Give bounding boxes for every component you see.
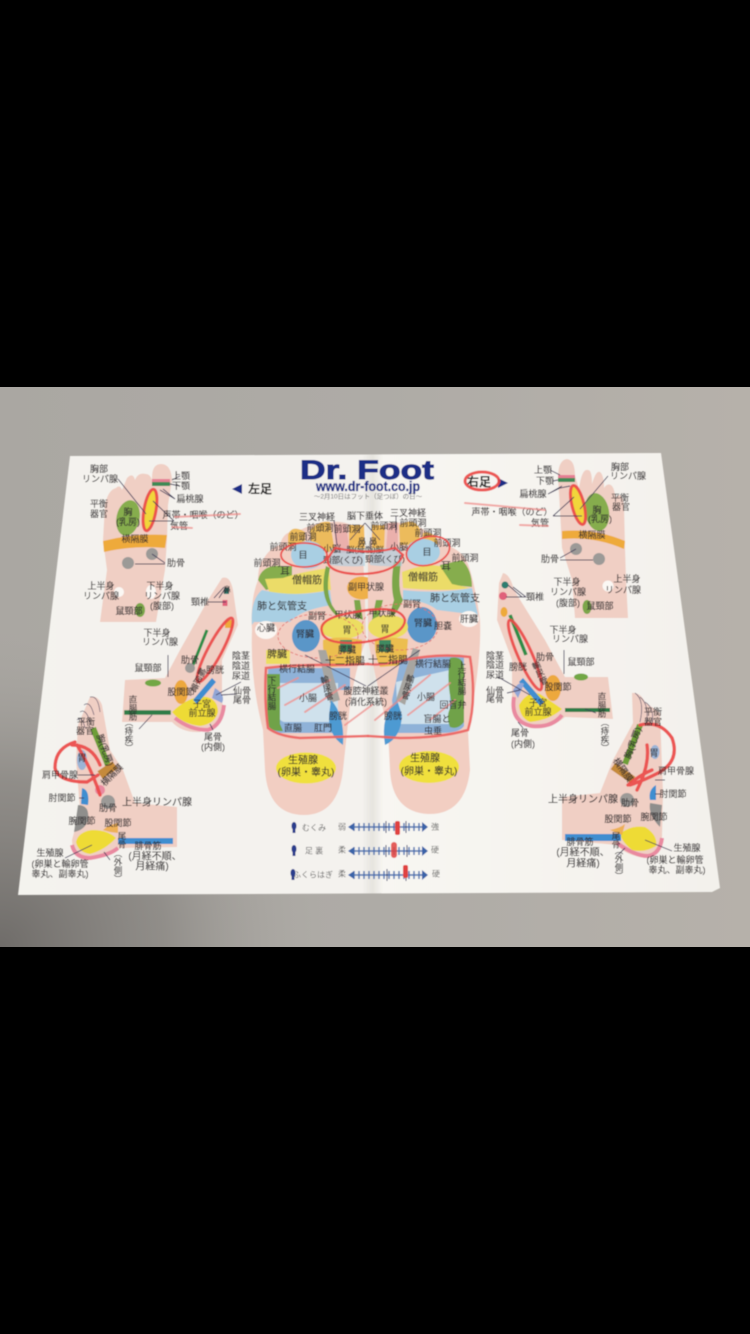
foot: bottom-left side view: 尾骨 xyxy=(117,832,127,848)
foot: central right sole: (消化系統) xyxy=(345,696,387,707)
foot: top-left sole: 下半身 xyxy=(146,580,174,591)
foot: top-left sole: (乳房) xyxy=(116,516,140,527)
central labels: toes to organs: 膵臓 xyxy=(338,644,356,655)
foot: top-right sole: 肋骨 xyxy=(541,554,559,564)
central labels: toes to organs: 耳 xyxy=(280,566,290,578)
central labels: toes to organs: 前頭洞 xyxy=(289,531,317,542)
foot: top-left sole: 横隔膜 xyxy=(121,533,149,544)
foot: central right sole: 虫垂 xyxy=(424,725,442,736)
foot: central right sole: 上行結腸 xyxy=(457,661,467,696)
central labels: toes to organs: 小脳 xyxy=(390,541,408,552)
foot: bottom-right side view: 生殖腺 xyxy=(673,842,701,853)
central labels: toes to organs: 甲状腺 xyxy=(334,609,362,620)
foot: central left sole: (卵巣・睾丸) xyxy=(278,766,334,778)
foot: top-left sole: 胸 xyxy=(123,506,133,517)
central labels: toes to organs: 小脳 xyxy=(323,543,341,554)
central labels: toes to organs: 腎臓 xyxy=(296,629,314,639)
foot: top-left sole: 胸部 xyxy=(90,463,108,474)
central labels: toes to organs: 肺と気管支 xyxy=(430,592,480,604)
label: right foot with red circle: 右足 xyxy=(467,474,491,489)
colon block xyxy=(267,650,350,745)
foot: mid-left side view: (内側) xyxy=(201,741,225,752)
foot: central left sole: 生殖腺 xyxy=(288,754,318,766)
foot: top-right sole: 横隔膜 xyxy=(578,529,606,540)
foot: bottom-right side view: 肘関節 xyxy=(659,788,687,799)
foot: mid-right side view: 尿道 xyxy=(486,669,504,680)
foot: top-right sole: (腹部) xyxy=(556,597,580,608)
central labels: toes to organs: 腎臓 xyxy=(414,618,432,628)
foot: bottom-left side view: 腕関節 xyxy=(68,815,96,826)
foot: top-right sole: 扁桃腺 xyxy=(519,488,547,499)
central labels: toes to organs: 前頭洞 xyxy=(333,523,361,534)
logo: Dr. Foot: ～2月10日はフット（足つぼ）の日～ xyxy=(314,492,423,500)
sole base xyxy=(252,522,366,815)
foot: bottom-left side view: 股関節 xyxy=(104,817,132,828)
foot: central right sole xyxy=(343,521,480,814)
central labels: toes to organs: 脳下垂体 xyxy=(347,510,383,521)
central labels: toes to organs: 肺と気管支 xyxy=(257,600,307,612)
foot: mid-right side view: 肋骨 xyxy=(536,652,554,662)
foot: central left sole: 脾臓 xyxy=(267,648,287,660)
central labels: toes to organs: 目 xyxy=(298,550,308,560)
foot: mid-left side view: リンパ腺 xyxy=(142,636,178,647)
slider: sole: 足 裏 xyxy=(305,846,323,856)
foot: bottom-left side view: 腓骨筋 xyxy=(134,840,162,851)
foot: mid-right side view: 下半身 xyxy=(549,624,577,635)
foot: central left sole xyxy=(252,522,377,815)
central labels: toes to organs: 心臓 xyxy=(257,622,275,633)
central labels: toes to organs: 胃 xyxy=(342,625,352,635)
foot: mid-left side view: 鼻 xyxy=(223,584,231,594)
foot: bottom-left side view: 横隔膜 xyxy=(98,761,125,788)
central labels: toes to organs: 胃 xyxy=(380,624,390,634)
foot: central left sole: 横行結腸 xyxy=(279,663,315,674)
foot: bottom-right side view: 横隔膜 xyxy=(611,755,636,784)
logo: Dr. Foot xyxy=(300,455,434,500)
foot: top-left sole: リンパ腺 xyxy=(144,590,180,601)
foot: central left sole: 肛門 xyxy=(314,723,332,733)
slider: swelling: 強 xyxy=(431,822,439,832)
foot: top-right sole: リンパ腺 xyxy=(610,470,646,481)
central labels: toes to organs: 十二指腸 xyxy=(368,654,408,666)
foot: mid-right side view: (内側) xyxy=(511,738,535,749)
label: right foot with red circle xyxy=(465,472,508,490)
foot: bottom-left side view: 肩甲骨腺 xyxy=(42,769,78,780)
foot: mid-right side view: 陰茎 xyxy=(486,650,504,661)
foot: central right sole: 横行結腸 xyxy=(415,658,451,669)
foot: mid-right side view: リンパ腺 xyxy=(552,633,588,644)
foot: top-right sole: 胸部 xyxy=(611,461,629,472)
foot: top-right sole: 気管 xyxy=(531,517,549,528)
sliders: foot condition scales xyxy=(290,821,440,881)
foot: mid-left side view: 尾骨 xyxy=(204,732,222,742)
black top band xyxy=(0,0,750,387)
foot: bottom-left side view: 平衡 xyxy=(77,716,95,727)
central labels: toes to organs xyxy=(253,507,480,668)
slider: calf: ふくらはぎ xyxy=(293,870,333,880)
foot: mid-left side view: 肋骨 xyxy=(181,655,199,665)
foot: top-left sole: 声帯・咽喉（のど） xyxy=(162,509,244,520)
foot: top-right sole: 平衡 xyxy=(611,492,629,503)
foot: top-left sole: 上顎 xyxy=(172,471,190,481)
foot: top-right sole: 上半身 xyxy=(613,573,641,584)
foot: central right sole: 回盲弁 xyxy=(439,699,467,710)
foot: mid-left side view: 下半身 xyxy=(143,627,171,638)
paper reflexology chart xyxy=(18,453,720,895)
foot: mid-left side view: 仙骨 xyxy=(233,685,251,696)
foot: top-right sole: 鼠頸部 xyxy=(586,600,614,611)
foot: bottom-left side view: (卵巣と輸卵管 xyxy=(32,858,88,869)
foot: mid-left side view: 膀胱 xyxy=(206,665,224,675)
foot: mid-right side view: 前立腺 xyxy=(524,706,552,717)
central labels: toes to organs: 僧帽筋 xyxy=(292,574,322,586)
foot: bottom-left side view: 器官 xyxy=(76,725,94,736)
central labels: toes to organs: 頸部(くび) xyxy=(365,554,405,564)
central labels: toes to organs: 胆嚢 xyxy=(434,620,452,631)
central labels: toes to organs: 脳(延髄)脳 xyxy=(346,544,384,554)
foot: mid-left side view xyxy=(122,578,251,752)
foot: top-right sole: 下顎 xyxy=(536,476,554,486)
label: left foot: 左足 xyxy=(248,481,272,496)
foot: central left sole: 輸尿管 xyxy=(319,674,335,703)
colon block xyxy=(384,648,464,745)
label: left foot xyxy=(232,481,272,496)
foot: top-left sole: 下顎 xyxy=(172,481,190,491)
central labels: toes to organs: 副腎 xyxy=(308,611,326,621)
logo: Dr. Foot: Dr. Foot xyxy=(300,455,434,485)
central labels: toes to organs: 前頭洞 xyxy=(306,522,334,533)
central labels: toes to organs: 副甲状腺 xyxy=(348,581,384,592)
foot: mid-left side view: （痔疾） xyxy=(124,718,134,752)
foot: mid-left side view: 直腸筋 xyxy=(128,695,138,722)
slider: sole: 柔 xyxy=(338,844,346,854)
slider: swelling: むくみ xyxy=(302,824,326,832)
paper sheet xyxy=(18,453,720,895)
foot: bottom-right side view: 尾骨 xyxy=(611,832,621,848)
foot: bottom-left side view: (月経不順、 xyxy=(128,850,182,862)
foot: top-left sole: リンパ腺 xyxy=(82,473,118,484)
foot: mid-right side view: 陰道 xyxy=(486,659,504,670)
foot: mid-left side view: 子宮 xyxy=(193,698,211,709)
central labels: toes to organs: 耳 xyxy=(441,560,451,572)
slider: calf: 柔 xyxy=(338,868,346,878)
central labels: toes to organs: 鼻 xyxy=(368,536,378,547)
foot: top-left sole xyxy=(82,463,244,622)
foot: central right sole: 生殖腺 xyxy=(410,752,440,764)
foot: mid-right side view: 尾骨 xyxy=(486,694,504,704)
foot: mid-right side view: 頸椎 xyxy=(526,591,544,602)
logo: Dr. Foot: www.dr-foot.co.jp xyxy=(315,478,420,494)
central labels: toes to organs: 三叉神経 xyxy=(390,507,426,518)
foot: mid-right side view: 仙骨 xyxy=(486,685,504,696)
foot: top-right sole: 上顎 xyxy=(534,465,552,475)
foot: top-right sole xyxy=(465,459,646,618)
foot: top-right sole: 胸 xyxy=(592,504,602,515)
foot: top-right sole: 声帯・咽喉（のど） xyxy=(471,506,553,517)
foot: bottom-right side view: 胃 xyxy=(649,748,659,758)
foot: bottom-right side view: (月経不順、 xyxy=(556,846,610,858)
central labels: toes to organs: 前頭洞 xyxy=(433,537,461,548)
foot: bottom-left side view: 生殖腺 xyxy=(36,847,64,858)
foot: top-left sole: 平衡 xyxy=(90,498,108,509)
foot: central right sole: 膀胱 xyxy=(384,711,402,721)
foot: mid-left side view: 陰道 xyxy=(232,660,250,671)
slider: calf xyxy=(290,865,440,881)
central labels: toes to organs: 三叉神経 xyxy=(299,511,335,522)
foot: bottom-left side view xyxy=(32,697,192,883)
foot: top-right sole: (乳房) xyxy=(588,513,612,524)
slider: swelling xyxy=(292,821,439,835)
foot: bottom-right side view: 腕関節 xyxy=(640,811,668,822)
foot: top-left sole: (腹部) xyxy=(150,600,174,611)
foot: bottom-left side view: 肋骨 xyxy=(99,803,117,813)
foot: central left sole: 膀胱 xyxy=(329,711,347,721)
grey table background xyxy=(0,387,750,947)
central labels: toes to organs: 頸部(くび) xyxy=(323,555,363,565)
foot: bottom-right side view xyxy=(548,693,706,880)
foot: bottom-left side view: 月経痛) xyxy=(135,860,169,872)
foot: mid-right side view: 直腸筋 xyxy=(597,692,607,719)
slider: calf: 硬 xyxy=(432,870,440,878)
foot: mid-left side view: 輸尿管 xyxy=(188,666,208,695)
foot: bottom-left side view: 胃 xyxy=(77,753,87,763)
foot: central right sole: 盲腸と xyxy=(423,714,451,724)
foot: bottom-left side view: （外側） xyxy=(113,849,123,883)
foot: mid-right side view xyxy=(486,573,613,752)
foot: mid-left side view: 尿道 xyxy=(232,670,250,681)
foot: bottom-right side view: 胸(乳房) xyxy=(622,725,643,760)
central labels: toes to organs: 甲状腺 xyxy=(368,607,396,618)
foot: bottom-right side view: 肩甲骨腺 xyxy=(658,765,694,776)
foot: top-left sole: 肋骨 xyxy=(167,558,185,568)
central labels: toes to organs: 十二指腸 xyxy=(325,654,365,668)
foot: bottom-right side view: 月経痛) xyxy=(566,856,600,870)
foot: central right sole: 輸尿管 xyxy=(400,673,416,702)
central labels: toes to organs: 前頭洞 xyxy=(370,520,398,531)
central labels: toes to organs: 前頭洞 xyxy=(399,517,427,528)
foot: central right sole: 小腸 xyxy=(417,692,435,702)
foot: mid-left side view: 陰茎 xyxy=(232,650,250,661)
foot: mid-left side view: 頸椎 xyxy=(191,596,209,607)
foot: mid-left side view: 鼠頸部 xyxy=(134,662,162,673)
foot: mid-left side view: 前立腺 xyxy=(188,707,216,718)
central labels: toes to organs: 肝臓 xyxy=(460,614,478,624)
foot: top-right sole: リンパ腺 xyxy=(605,584,641,595)
foot: top-left sole: 器官 xyxy=(90,508,108,519)
central labels: toes to organs: 前頭洞 xyxy=(414,527,442,538)
slider: swelling: 弱 xyxy=(338,822,346,832)
central labels: toes to organs: 前頭洞 xyxy=(451,552,479,563)
slider: sole xyxy=(292,842,439,858)
foot: bottom-right side view: 睾丸、副睾丸) xyxy=(648,864,706,875)
central labels: toes to organs: 鼻 xyxy=(357,536,367,547)
foot: central right sole: 腹腔神経叢 xyxy=(343,685,389,696)
foot: mid-left side view: 尾骨 xyxy=(233,695,251,705)
foot: bottom-right side view: 器官 xyxy=(644,716,662,727)
foot: bottom-right side view: (卵巣と輸卵管 xyxy=(646,854,704,865)
foot: top-left sole: 上半身 xyxy=(87,580,115,591)
foot: mid-right side view: 子宮 xyxy=(529,697,547,708)
foot: mid-right side view: （痔疾） xyxy=(600,718,610,752)
foot: top-left sole: 鼠頸部 xyxy=(115,605,143,616)
red marker circles xyxy=(281,532,453,643)
foot: top-left sole: 扁桃腺 xyxy=(176,493,204,504)
central labels: toes to organs: 副腎 xyxy=(403,599,421,609)
foot: mid-right side view: 膀胱 xyxy=(509,662,527,672)
foot: mid-left side view: 股関節 xyxy=(167,686,195,697)
foot: bottom-left side view: 睾丸、副睾丸) xyxy=(32,868,89,879)
slider: sole: 硬 xyxy=(431,846,439,854)
foot: mid-right side view: 股関節 xyxy=(544,681,572,692)
central labels: toes to organs: 前頭洞 xyxy=(269,541,297,552)
foot: bottom-left side view: 上半身リンパ腺 xyxy=(122,796,192,808)
foot: central left sole: 直腸 xyxy=(284,722,302,733)
foot: top-right sole: 器官 xyxy=(612,501,630,512)
central labels: toes to organs: 膵臓 xyxy=(376,643,394,654)
foot: bottom-right side view: 肋骨 xyxy=(621,798,639,808)
foot: bottom-left side view: 肘関節 xyxy=(48,792,76,803)
foot: bottom-left side view: 胸(乳房) xyxy=(95,732,116,767)
foot: bottom-right side view: 平衡 xyxy=(644,706,662,717)
foot: central left sole: 小腸 xyxy=(299,693,317,703)
foot: central left sole: 下行結腸 xyxy=(267,676,277,711)
black bottom band xyxy=(0,947,750,1334)
central labels: toes to organs: 前頭洞 xyxy=(253,557,281,568)
foot: mid-right side view: 鼠頸部 xyxy=(567,656,595,667)
foot: top-left sole: 気管 xyxy=(170,520,188,531)
foot: bottom-right side view: （外側） xyxy=(614,846,624,880)
foot: central right sole: (卵巣・睾丸) xyxy=(401,764,457,778)
foot: bottom-right side view: 上半身リンパ腺 xyxy=(548,792,618,806)
foot: mid-right side view: 尾骨 xyxy=(511,728,529,738)
foot: bottom-right side view: 腓骨筋 xyxy=(566,836,594,847)
central labels: toes to organs: 目 xyxy=(422,547,432,557)
foot: mid-right side view: 輸尿管 xyxy=(530,659,550,688)
foot: top-right sole: リンパ腺 xyxy=(550,586,586,597)
foot: top-left sole: リンパ腺 xyxy=(83,590,119,601)
foot: top-right sole: 下半身 xyxy=(553,576,581,587)
central labels: toes to organs: 僧帽筋 xyxy=(408,570,438,584)
foot: bottom-right side view: 股関節 xyxy=(604,813,632,824)
